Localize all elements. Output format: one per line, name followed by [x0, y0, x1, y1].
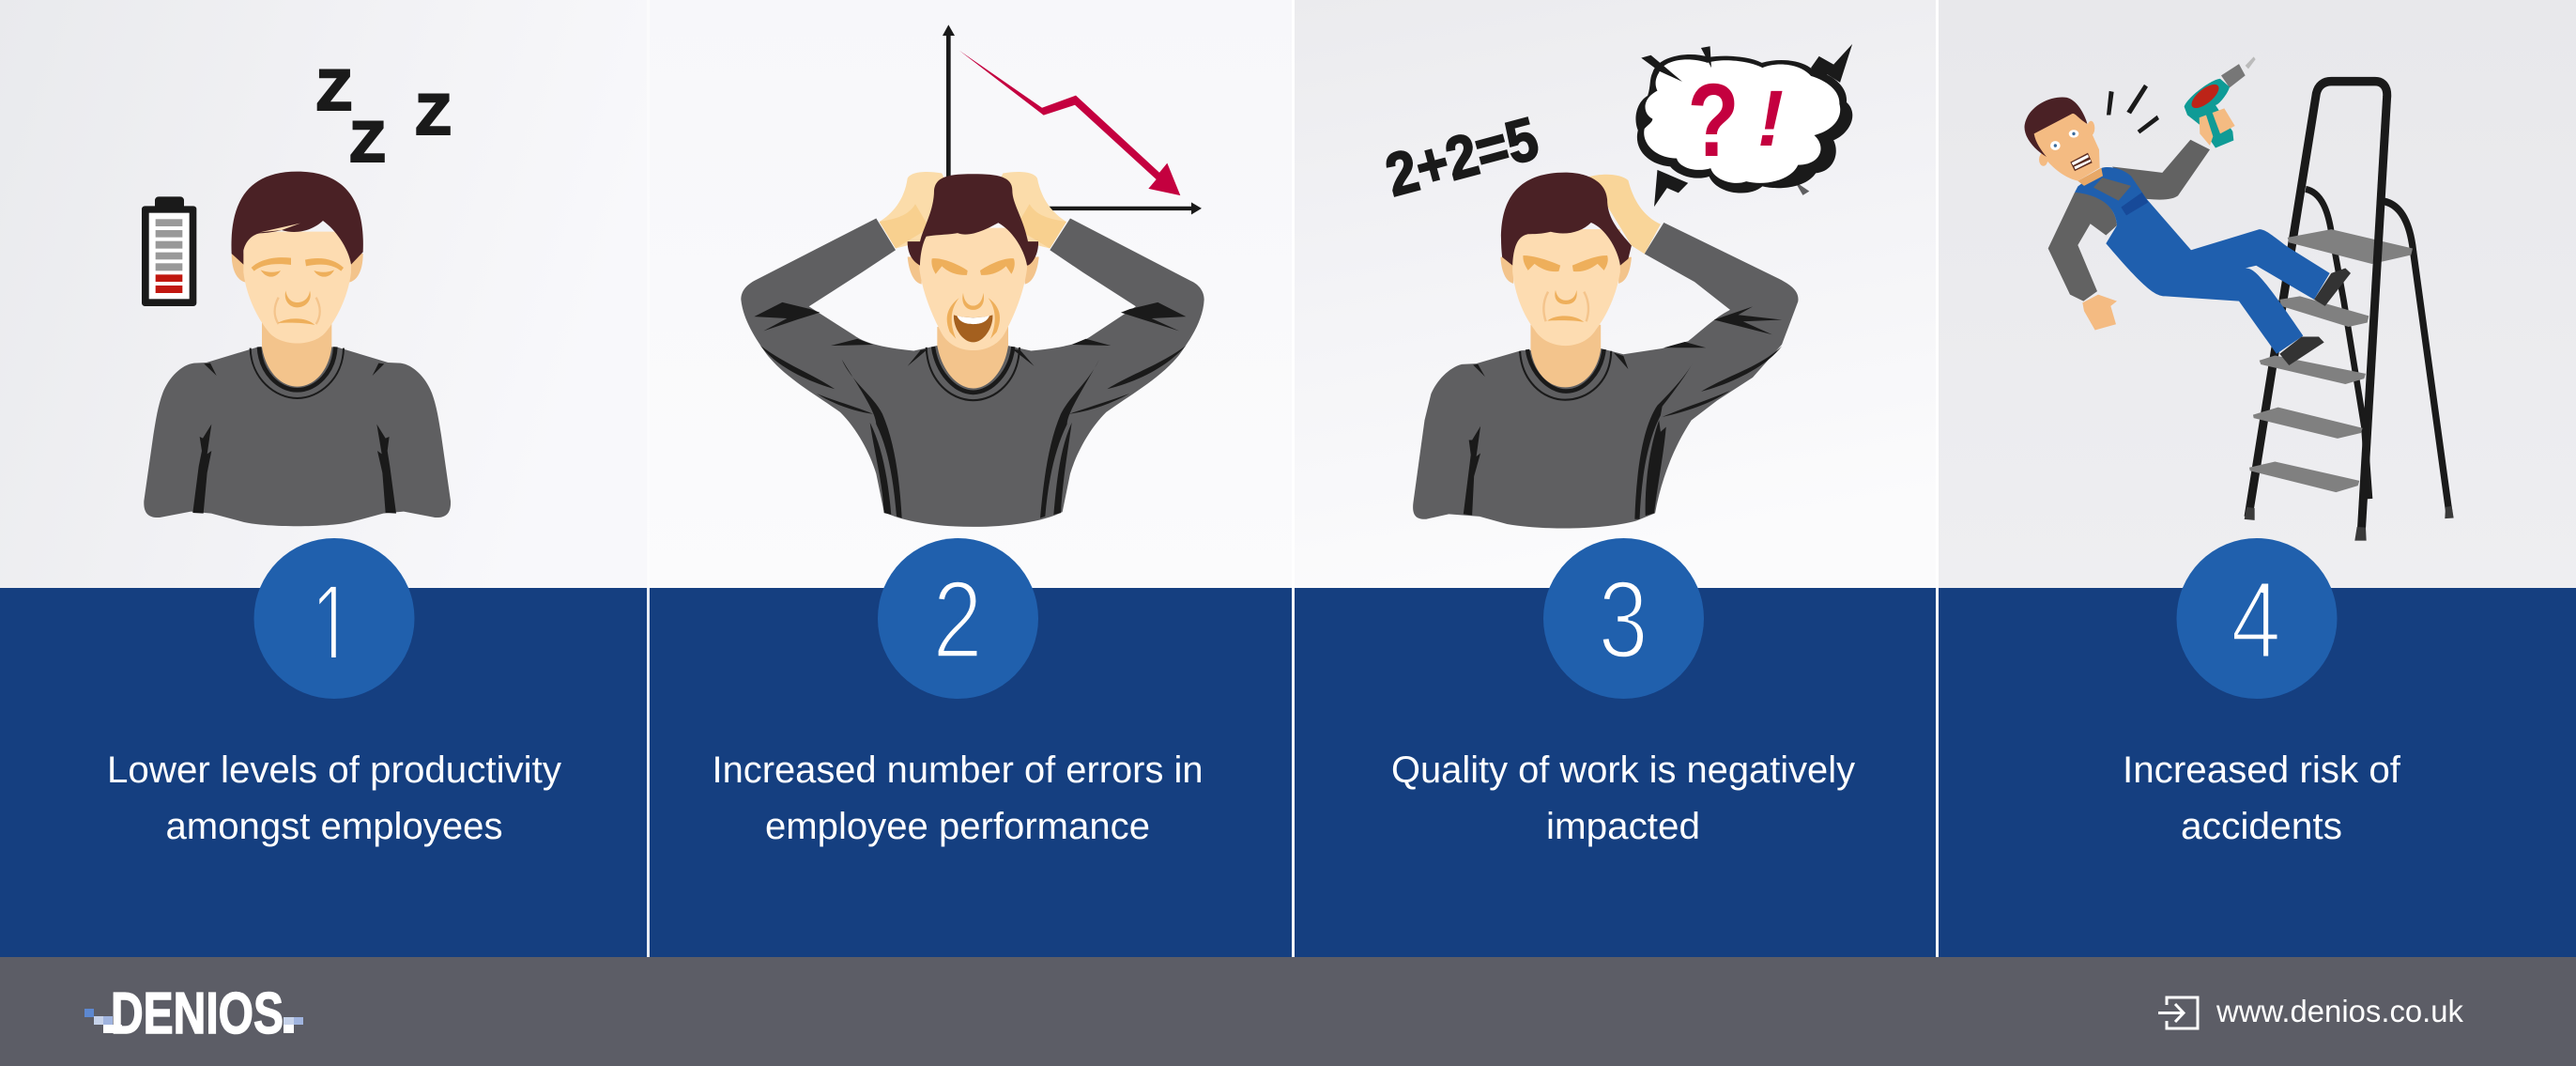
- logo: DENIOS: DENIOS: [111, 981, 284, 1046]
- caption 1: Lower levels of productivity: [107, 749, 561, 791]
- footer bar: [0, 957, 2576, 1066]
- number badge 3: [1543, 538, 1704, 699]
- illustration: man screaming with falling chart: [741, 24, 1204, 527]
- icon: sleeping Z letters: [316, 58, 451, 174]
- icon: sleeping Z letters: Z: [316, 58, 351, 122]
- caption 4: [2123, 749, 2401, 847]
- chart: falling arrow: [943, 24, 1202, 214]
- number badge 2: [878, 538, 1038, 699]
- number badge 2: 2: [932, 558, 983, 681]
- icon: low battery: [142, 196, 196, 306]
- website url: www.denios.co.uk: [2216, 994, 2463, 1028]
- falling worker: [2025, 56, 2351, 365]
- illustration: man falling from ladder: [2025, 56, 2454, 541]
- man figure: [741, 172, 1204, 527]
- icon: sleeping Z letters: Z: [416, 83, 451, 147]
- icon: sleeping Z letters: Z: [350, 110, 385, 174]
- number badge 3: 3: [1598, 558, 1648, 681]
- caption 2: employee performance: [765, 806, 1150, 847]
- illustration: confused man with wrong sum: [1413, 44, 1852, 529]
- caption 2: [712, 749, 1204, 847]
- icon: website link arrow: [2158, 997, 2198, 1028]
- number badge 4: 4: [2231, 558, 2281, 681]
- speech bubble: [1635, 44, 1852, 207]
- caption 3: impacted: [1546, 806, 1700, 847]
- man figure: [1413, 173, 1798, 529]
- man figure: [144, 172, 451, 526]
- number badge 1: 1: [311, 561, 354, 690]
- wrong sum text: 2+2=5: [1379, 104, 1545, 209]
- caption 3: Quality of work is negatively: [1391, 749, 1855, 791]
- question mark: ?: [1687, 64, 1740, 178]
- caption 1: amongst employees: [165, 806, 503, 847]
- caption 4: accidents: [2181, 806, 2342, 847]
- number badge 1: [253, 538, 415, 699]
- caption 4: Increased risk of: [2123, 749, 2401, 791]
- caption 2: Increased number of errors in: [712, 749, 1204, 791]
- icon: cordless drill: [2185, 56, 2256, 148]
- caption 1: [107, 749, 561, 847]
- illustration: tired man with low battery: [142, 58, 451, 526]
- caption 3: [1391, 749, 1855, 847]
- number badge 4: [2176, 538, 2338, 699]
- stepladder: [2245, 82, 2454, 541]
- exclamation mark: !: [1757, 74, 1784, 162]
